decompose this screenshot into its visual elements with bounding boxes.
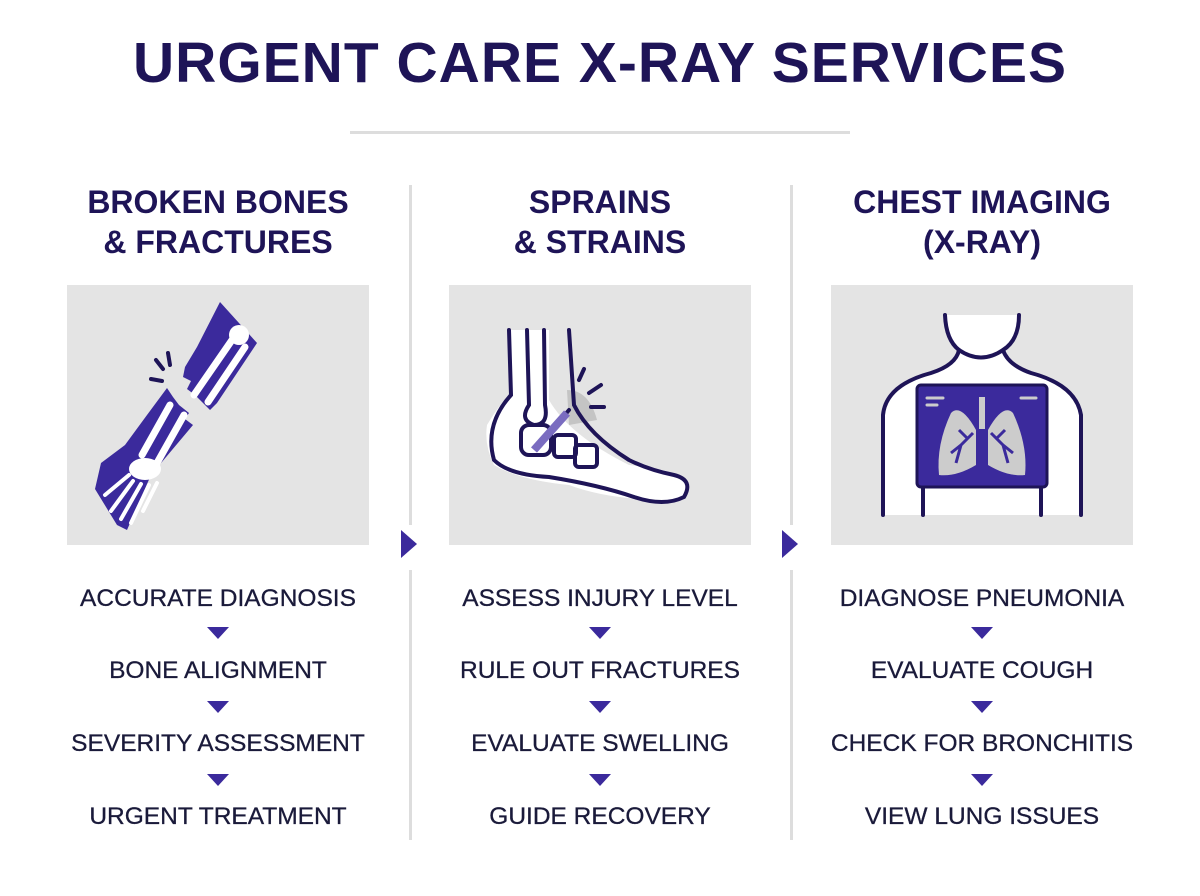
heading: & FRACTURES [103,224,333,260]
heading: & STRAINS [514,224,686,260]
panel: chest imaging: EVALUATE COUGH [871,657,1093,684]
panel: chest imaging: CHECK FOR BRONCHITIS [831,730,1133,757]
title underline [350,131,850,134]
icon: broken arm [67,285,369,545]
panel: sprains: RULE OUT FRACTURES [460,657,740,684]
panel: sprains: GUIDE RECOVERY [489,803,711,830]
panel: broken bones: BONE ALIGNMENT [109,657,327,684]
panel: sprains: EVALUATE SWELLING [471,730,729,757]
panel: broken bones: URGENT TREATMENT [89,803,347,830]
icon: ankle [449,285,751,545]
list: ACCURATE DIAGNOSIS [80,585,356,612]
list: ASSESS INJURY LEVEL [462,585,738,612]
column dividers [409,185,412,525]
heading: BROKEN BONES [87,184,349,220]
heading [853,184,1111,260]
arrow: right 2 [782,530,798,558]
panel: sprains [449,184,751,830]
panel: broken bones: SEVERITY ASSESSMENT [71,730,365,757]
panel: chest imaging [831,184,1133,830]
heading: CHEST IMAGING [853,184,1111,220]
heading: SPRAINS [529,184,671,220]
panel: chest imaging: VIEW LUNG ISSUES [865,803,1099,830]
icon: chest x-ray [831,285,1133,545]
heading: (X-RAY) [923,224,1041,260]
heading [514,184,686,260]
heading [87,184,349,260]
arrow: right 1 [401,530,417,558]
list: DIAGNOSE PNEUMONIA [840,585,1124,612]
title: URGENT CARE X-RAY SERVICES [133,31,1067,95]
panel: broken bones [67,184,369,830]
